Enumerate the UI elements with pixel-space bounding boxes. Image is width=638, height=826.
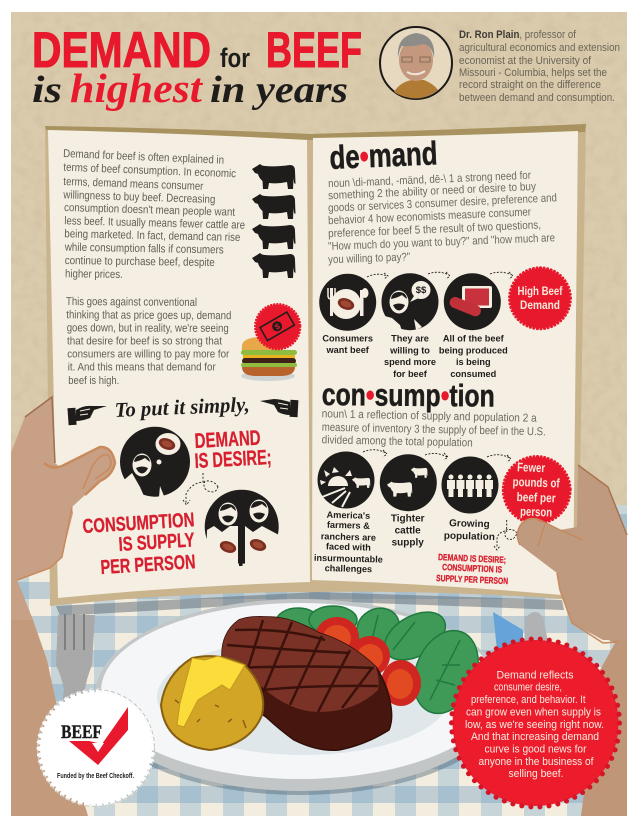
icon: two heads sharing beef <box>205 490 279 568</box>
left page text: demand explained: terms of beef consumption. In economic <box>63 162 236 180</box>
icon: burger with dollar stamp: $ <box>273 321 282 332</box>
stamp: Beef Checkoff logo <box>38 690 154 806</box>
callout: demand reflects: can grow even when supply is <box>466 706 601 718</box>
left page text: demand explained: while consumption falls if consumers <box>64 242 224 256</box>
left page text: demand explained <box>62 148 245 281</box>
definition text: behavior 4 how economists measure consumer <box>328 206 531 227</box>
captions: consumption steps: Growing <box>449 518 490 530</box>
callout: demand reflects: And that increasing demand <box>471 731 599 743</box>
stamp: Beef Checkoff logo: Funded by the Beef Checkoff. <box>57 771 134 780</box>
icon: person willing to spend: $$ <box>416 285 427 296</box>
captions: demand steps: is being <box>456 357 491 367</box>
heading: DEMAND <box>32 22 211 78</box>
captions: consumption steps: insurmountable <box>314 553 383 565</box>
captions: demand steps: willing to <box>389 346 430 356</box>
heading: is <box>32 69 62 111</box>
right thumb over book <box>517 465 627 643</box>
callout: demand reflects: preference, and behavior. It <box>471 694 586 706</box>
definition text <box>322 408 546 449</box>
arrows: consumption flow <box>363 450 511 462</box>
callout: demand reflects: anyone in the business of <box>478 756 594 768</box>
left page text: against conventional thinking: This goes against conventional <box>66 296 197 309</box>
icon: sun and farmland <box>318 452 374 508</box>
definition text: measure of inventory 3 the supply of beef in the U.S. <box>322 422 546 438</box>
definition text: "How much do you want to buy?" and "how much are <box>328 232 555 253</box>
left thumb over book <box>11 397 115 620</box>
icon: plate and cutlery <box>319 274 376 331</box>
red note: demand is desire: DEMAND IS DESIRE; <box>438 552 506 565</box>
baked potato <box>161 656 263 750</box>
book shadow on table <box>56 592 564 616</box>
captions: consumption steps: America's <box>326 510 370 521</box>
left page text: demand explained: being marketed. In fact, demand can rise <box>64 228 240 244</box>
arrow: dotted loop <box>183 473 218 505</box>
captions: demand steps <box>322 334 508 379</box>
icon: pointing hand left <box>260 399 298 417</box>
right page <box>312 131 578 596</box>
icon: two cattle <box>380 454 437 511</box>
headline: demand is desire <box>194 427 272 473</box>
icon: pointing hand right <box>67 406 107 425</box>
icon: burger with dollar stamp <box>241 304 300 381</box>
word: con-sump-tion: con•sump•tion <box>322 377 495 414</box>
left page text: demand explained: higher prices. <box>65 268 123 281</box>
word: de-mand: de•mand <box>329 134 438 176</box>
captions: demand steps: consumed <box>450 369 496 379</box>
callout: demand reflects <box>452 639 620 807</box>
red note: demand is desire: CONSUMPTION IS <box>442 562 502 575</box>
captions: consumption steps: challenges <box>325 563 372 574</box>
captions: consumption steps: cattle <box>395 525 421 536</box>
left page text: demand explained: continue to purchase beef, despite <box>65 255 215 269</box>
left page text: demand explained: Demand for beef is often explained in <box>63 148 224 167</box>
left page text: against conventional thinking: beef is high. <box>68 375 119 387</box>
expert bio: record straight on the difference <box>459 79 601 91</box>
arrow: dotted down to conclusion <box>494 520 517 550</box>
definition text: something 2 the ability or need or desire to buy <box>328 181 537 202</box>
plate <box>95 599 505 795</box>
badge: high beef demand: Demand <box>520 298 560 312</box>
headline: consumption is supply per person: PER PERSON <box>100 551 196 579</box>
captions: consumption steps: faced with <box>326 541 371 553</box>
heading <box>32 22 362 111</box>
expert bio <box>459 29 620 104</box>
captions: consumption steps: Tighter <box>391 514 425 525</box>
captions: consumption steps: ranchers are <box>321 531 376 543</box>
icon: packaged ground beef <box>444 273 501 330</box>
badge: fewer pounds of beef per person: pounds of <box>512 475 561 491</box>
left page <box>48 130 310 598</box>
headline: consumption is supply per person: CONSUMPTION <box>82 509 195 538</box>
heading: highest <box>70 65 204 111</box>
left page text: demand explained: consumption doesn't mean people want <box>64 202 236 219</box>
captions: consumption steps: population <box>444 531 495 543</box>
lettuce <box>276 601 490 723</box>
captions: demand steps: All of the beef <box>443 334 505 344</box>
headline: consumption is supply per person: IS SUPPLY <box>118 529 196 556</box>
definition text: you willing to pay?" <box>328 251 410 266</box>
callout: demand reflects: selling beef. <box>508 768 564 780</box>
left page text: against conventional thinking <box>66 296 231 387</box>
badge: high beef demand: High Beef <box>518 284 563 298</box>
book cover <box>45 124 586 606</box>
callout: demand reflects: consumer desire, <box>494 682 562 694</box>
right arm and palm behind the book <box>560 465 627 816</box>
left page text: against conventional thinking: thinking that as price goes up, demand <box>66 309 231 322</box>
captions: consumption steps: farmers & <box>327 520 370 531</box>
right page: consumption definition <box>322 377 546 449</box>
badge: fewer pounds of beef per person: beef per <box>516 490 556 505</box>
left page text: demand explained: less beef. It usually means fewer cattle are <box>64 215 245 232</box>
fork <box>56 614 95 720</box>
captions: consumption steps: supply <box>392 538 424 549</box>
callout: demand reflects: curve is good news for <box>484 744 587 756</box>
heading: for <box>220 43 250 73</box>
captions: demand steps: Consumers <box>322 334 373 344</box>
red note: demand is desire: SUPPLY PER PERSON <box>436 573 508 586</box>
definition text <box>328 170 557 266</box>
portrait of Dr. Ron Plain <box>380 27 452 99</box>
icon: person willing to spend <box>381 273 438 331</box>
captions: demand steps: for beef <box>393 369 428 379</box>
headline: consumption is supply per person <box>82 509 196 579</box>
captions: consumption steps <box>314 510 495 574</box>
expert bio: between demand and consumption. <box>459 92 615 104</box>
badge: fewer pounds of beef per person: Fewer <box>517 460 545 475</box>
badge: fewer pounds of beef per person: person <box>520 504 552 520</box>
left page text: against conventional thinking: it. And this means that demand for <box>68 362 216 374</box>
left page text: against conventional thinking: goes down, but in reality, we're seeing <box>67 322 229 335</box>
callout: demand reflects: Demand reflects <box>496 669 574 681</box>
tomatoes <box>315 617 421 706</box>
to put it simply banner <box>67 392 298 425</box>
right page: demand definition <box>328 134 557 266</box>
captions: demand steps: want beef <box>326 345 370 355</box>
headline: demand is desire: DEMAND <box>194 427 261 453</box>
left page text: demand explained: terms, demand means consumer <box>63 176 204 193</box>
icons: four cattle <box>252 164 296 278</box>
expert bio: agricultural economics and extension <box>459 42 620 54</box>
definition text: goods or services 3 consumer desire, preference and <box>328 192 557 215</box>
napkin and knife <box>493 612 552 660</box>
captions: demand steps: spend more <box>384 357 436 367</box>
red note: demand is desire <box>436 552 508 586</box>
captions: demand steps: being produced <box>439 346 508 356</box>
icon: five people <box>442 456 498 514</box>
badge: fewer pounds of beef per person <box>503 456 570 524</box>
badge: high beef demand <box>510 268 570 329</box>
definition text: noun\ 1 a reflection of supply and population 2 a <box>322 408 537 425</box>
expert bio: Missouri - Columbia, helps set the <box>459 67 607 79</box>
left page text: demand explained: willingness to buy beef. Decreasing <box>62 189 215 206</box>
left page text: against conventional thinking: that desire for beef is so strong that <box>67 336 223 348</box>
open book <box>45 124 586 606</box>
definition text: divided among the total population <box>322 434 473 449</box>
stamp: Beef Checkoff logo: BEEF <box>61 722 102 743</box>
definition text: noun \di-mand, -mänd, dē-\ 1 a strong need for <box>328 170 531 190</box>
heading: in years <box>210 69 348 111</box>
to put it simply banner: To put it simply, <box>114 392 250 422</box>
arrows: demand flow <box>367 272 513 279</box>
steak <box>222 617 392 750</box>
left arm and palm behind the book <box>11 397 88 816</box>
heading: BEEF <box>266 22 362 78</box>
expert bio: Dr. Ron Plain, professor of <box>459 29 577 41</box>
headline: demand is desire: IS DESIRE; <box>194 446 272 473</box>
expert bio: economist at the University of <box>459 55 592 67</box>
left page text: against conventional thinking: consumers are willing to pay more for <box>67 349 229 361</box>
captions: demand steps: They are <box>391 334 429 344</box>
definition text: preference for beef 5 the result of two questions, <box>328 219 541 240</box>
tablecloth <box>11 505 627 816</box>
callout: demand reflects: low, as we're seeing right now. <box>465 719 604 731</box>
icon: desire head with thought of beef <box>118 427 190 500</box>
